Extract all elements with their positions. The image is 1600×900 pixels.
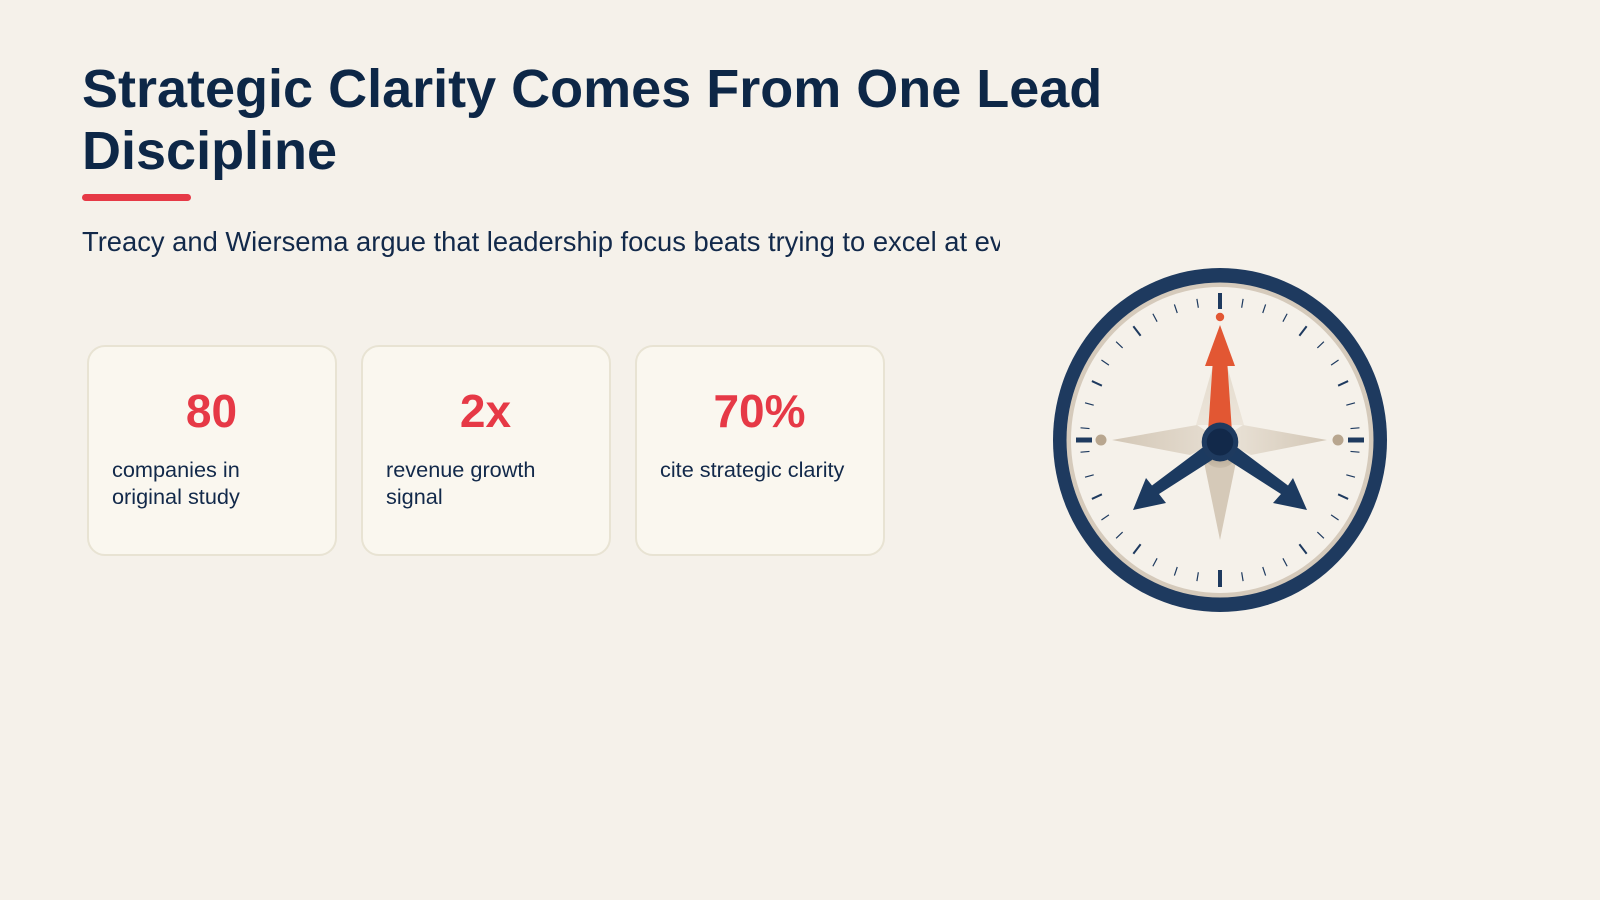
tick marks [1076, 293, 1364, 587]
stat number: 80 [186, 385, 237, 437]
north dot [1216, 313, 1224, 321]
west dot [1096, 434, 1106, 446]
red north arrow [1205, 325, 1235, 432]
compass face [1071, 287, 1369, 593]
stat card: 80 companies [86, 345, 336, 556]
compass star [1112, 366, 1327, 540]
stat number: 70% [713, 385, 806, 437]
east dot [1332, 434, 1344, 446]
icon: compass [1053, 268, 1387, 612]
hub [1202, 422, 1238, 462]
stat number: 2x [460, 385, 511, 437]
compass inner ring [1066, 282, 1374, 598]
accent bar [82, 194, 191, 201]
hub shadow [1204, 440, 1236, 468]
stat label: revenue growth signal [386, 457, 536, 509]
navy right arrow [1220, 442, 1307, 510]
compass outer ring [1053, 268, 1387, 612]
stat label: companies in original study [112, 457, 240, 509]
stat card: 70% strategic clarity [634, 345, 884, 556]
title: Strategic Clarity Comes From One Lead Discipline [82, 59, 1102, 181]
stat card: 2x revenue growth [360, 345, 610, 556]
stat label: cite strategic clarity [660, 457, 844, 482]
navy left arrow [1133, 442, 1220, 510]
